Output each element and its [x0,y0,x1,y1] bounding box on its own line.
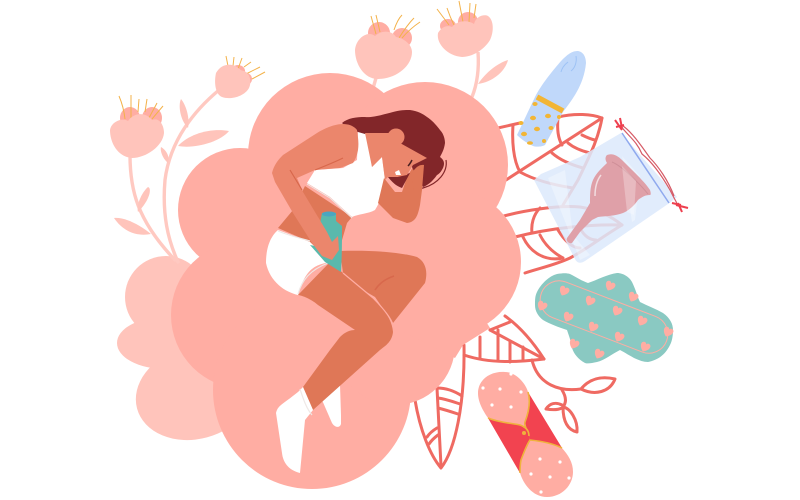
vine with leaves [532,360,615,432]
white top [307,132,385,217]
neck and face [365,133,427,180]
back leg [340,251,426,323]
crease arm [290,158,343,190]
hot water bottle [310,212,342,272]
leaf middle right [500,207,622,273]
hair lower lock [388,173,410,188]
flowers left with stems [110,56,265,262]
far foot sock [322,385,341,427]
near shoulder and upper arm [272,124,358,243]
front leg [298,262,393,410]
far arm supporting head [378,167,423,223]
hair [342,110,445,187]
menstrual cup in bag [534,118,688,263]
near foot sock [276,387,313,473]
tampon [517,51,586,147]
belly [278,186,352,262]
underwear [266,230,330,295]
leaf lower right [464,316,544,362]
ear [388,128,404,146]
menstrual pad with wings [478,372,573,497]
hand at forehead [411,165,424,190]
panty liner with hearts [535,273,674,363]
woman lying down [266,110,446,473]
hair strand [416,160,446,189]
main pink cloud [171,73,521,489]
hand on bottle [312,217,339,260]
gap between legs [343,273,393,325]
leaf top right [480,114,602,205]
leaf bottom [415,345,464,468]
back cloud [117,256,265,453]
eye [408,160,412,166]
flowers top with stems [355,1,508,97]
crease back leg [375,276,394,290]
mouth [395,170,401,175]
